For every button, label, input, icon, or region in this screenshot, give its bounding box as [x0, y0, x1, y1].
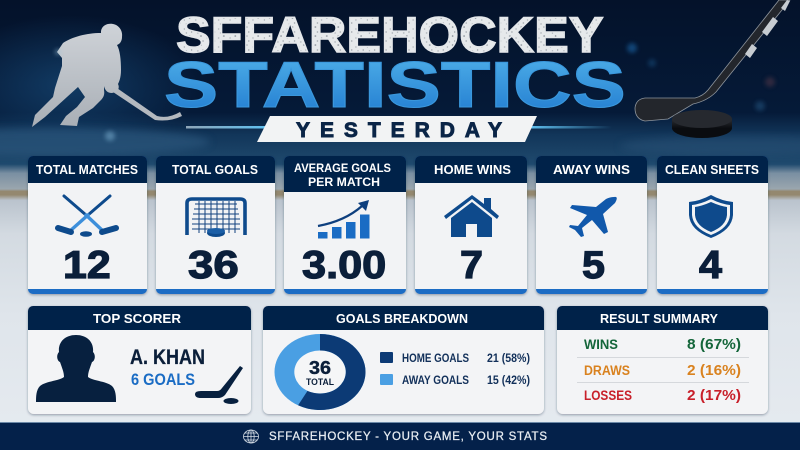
panel: goals breakdown	[263, 306, 544, 414]
icon: shield	[689, 195, 733, 238]
row: draws: 2 (16%)	[687, 362, 741, 379]
title: SFFAREHOCKEY: SFFAREHOCKEY	[176, 7, 604, 63]
card: away wins	[536, 156, 647, 294]
row: losses: 2 (17%)	[687, 387, 741, 404]
icon: globe	[244, 430, 258, 443]
donut chart: TOTAL	[306, 377, 334, 387]
legend: home goals: HOME GOALS	[402, 353, 469, 365]
row: wins: WINS	[584, 337, 618, 352]
card: home wins: HOME WINS	[434, 163, 511, 177]
card: total matches: 12	[63, 243, 111, 287]
panel: result summary	[557, 306, 768, 414]
panel: result summary: RESULT SUMMARY	[600, 311, 718, 326]
footer bar	[0, 422, 800, 450]
card: average goals per match: AVERAGE GOALS	[294, 161, 391, 175]
icon: crossed hockey sticks	[58, 196, 116, 237]
card: away wins: AWAY WINS	[553, 163, 630, 177]
panel: top scorer: TOP SCORER	[93, 311, 182, 326]
title: STATISTICS: STATISTICS	[164, 48, 626, 121]
row: losses	[584, 387, 741, 404]
card: average goals per match	[284, 156, 406, 294]
row: losses: LOSSES	[584, 388, 632, 403]
card: total goals	[156, 156, 275, 294]
subtitle banner: YESTERDAY: YESTERDAY	[296, 119, 502, 142]
donut chart: 36	[309, 358, 331, 378]
icon: airplane	[569, 197, 617, 237]
card: clean sheets: CLEAN SHEETS	[665, 163, 759, 177]
legend: home goals	[380, 352, 530, 365]
row: wins: 8 (67%)	[687, 336, 741, 353]
donut chart	[274, 334, 366, 410]
subtitle banner: YESTERDAY	[186, 116, 612, 142]
hockey stick and puck	[635, 0, 790, 138]
icon: stick and puck	[195, 366, 243, 404]
card: total matches	[28, 156, 147, 294]
footer bar: SFFAREHOCKEY - YOUR GAME, YOUR STATS	[269, 431, 547, 443]
card: average goals per match: 3.00	[302, 243, 386, 287]
icon: house	[444, 195, 499, 237]
card: total goals: 36	[188, 243, 239, 286]
icon: hockey goal	[187, 199, 245, 237]
card: clean sheets	[657, 156, 768, 294]
row: draws	[584, 362, 741, 379]
legend: away goals: 15 (42%)	[487, 375, 530, 387]
card: clean sheets: 4	[699, 243, 723, 287]
legend: away goals	[380, 374, 530, 387]
card: average goals per match: PER MATCH	[308, 175, 380, 189]
legend: away goals: AWAY GOALS	[402, 375, 469, 387]
panel: goals breakdown: GOALS BREAKDOWN	[336, 311, 468, 326]
row: draws: DRAWS	[584, 363, 630, 378]
icon: rising bar chart with arrow	[318, 200, 370, 238]
panel: top scorer	[28, 306, 251, 414]
legend: home goals: 21 (58%)	[487, 353, 530, 365]
card: home wins: 7	[460, 243, 483, 287]
icon: player silhouette	[36, 335, 116, 402]
card: total goals: TOTAL GOALS	[172, 163, 258, 177]
card: away wins: 5	[582, 243, 605, 287]
card: home wins	[415, 156, 527, 294]
panel: top scorer: 6 GOALS	[131, 371, 195, 389]
row: wins	[584, 336, 741, 353]
panel: top scorer: A. KHAN	[130, 346, 205, 369]
card: total matches: TOTAL MATCHES	[36, 163, 138, 177]
hockey player silhouette	[32, 24, 182, 127]
